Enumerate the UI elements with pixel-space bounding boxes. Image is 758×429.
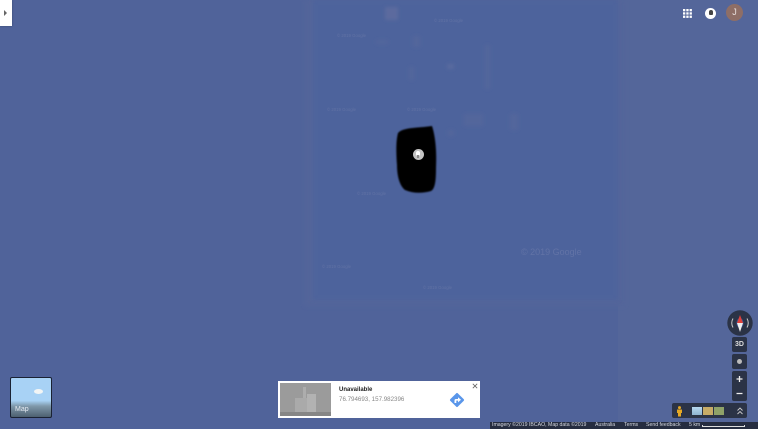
place title: Unavailable [339,387,372,393]
map watermarks: © 2019 Google [434,18,463,23]
info card [278,381,480,418]
apps grid icon [683,9,692,18]
layer thumbnails [692,407,724,415]
attribution bar: 5 km [689,422,700,428]
3D button [732,337,747,352]
user avatar [726,4,743,21]
layer toolbar [672,403,747,418]
compass [727,310,753,336]
side panel toggle [0,0,12,26]
map watermarks: © 2019 Google [423,285,452,290]
close icon [472,384,478,388]
attribution bar: Australia [595,422,615,428]
directions icon [450,392,464,408]
map watermarks: © 2019 Google [357,191,386,196]
coordinates: 76.794693, 157.982396 [339,396,404,403]
notification icon [705,8,716,18]
map watermarks: © 2019 Google [337,33,366,38]
black blob [396,126,436,193]
map watermarks: © 2019 Google [407,107,436,112]
map watermarks: © 2019 Google [322,264,351,269]
map layer thumbnail: Map [15,406,29,413]
zoom controls [732,371,747,401]
street view thumbnail [280,383,331,416]
location button [732,354,747,369]
map watermarks: © 2019 Google [521,247,582,257]
attribution bar: Send feedback [646,422,681,428]
user avatar: J [732,7,737,17]
location pin [412,149,424,160]
pegman icon [677,406,682,416]
expand icon [737,408,743,414]
attribution bar [490,422,758,429]
attribution bar: Imagery ©2019 IBCAO, Map data ©2019 [492,422,586,428]
map layer thumbnail [10,377,52,418]
3D button: 3D [735,341,744,348]
attribution bar: Terms [624,422,638,428]
map watermarks: © 2019 Google [327,107,356,112]
